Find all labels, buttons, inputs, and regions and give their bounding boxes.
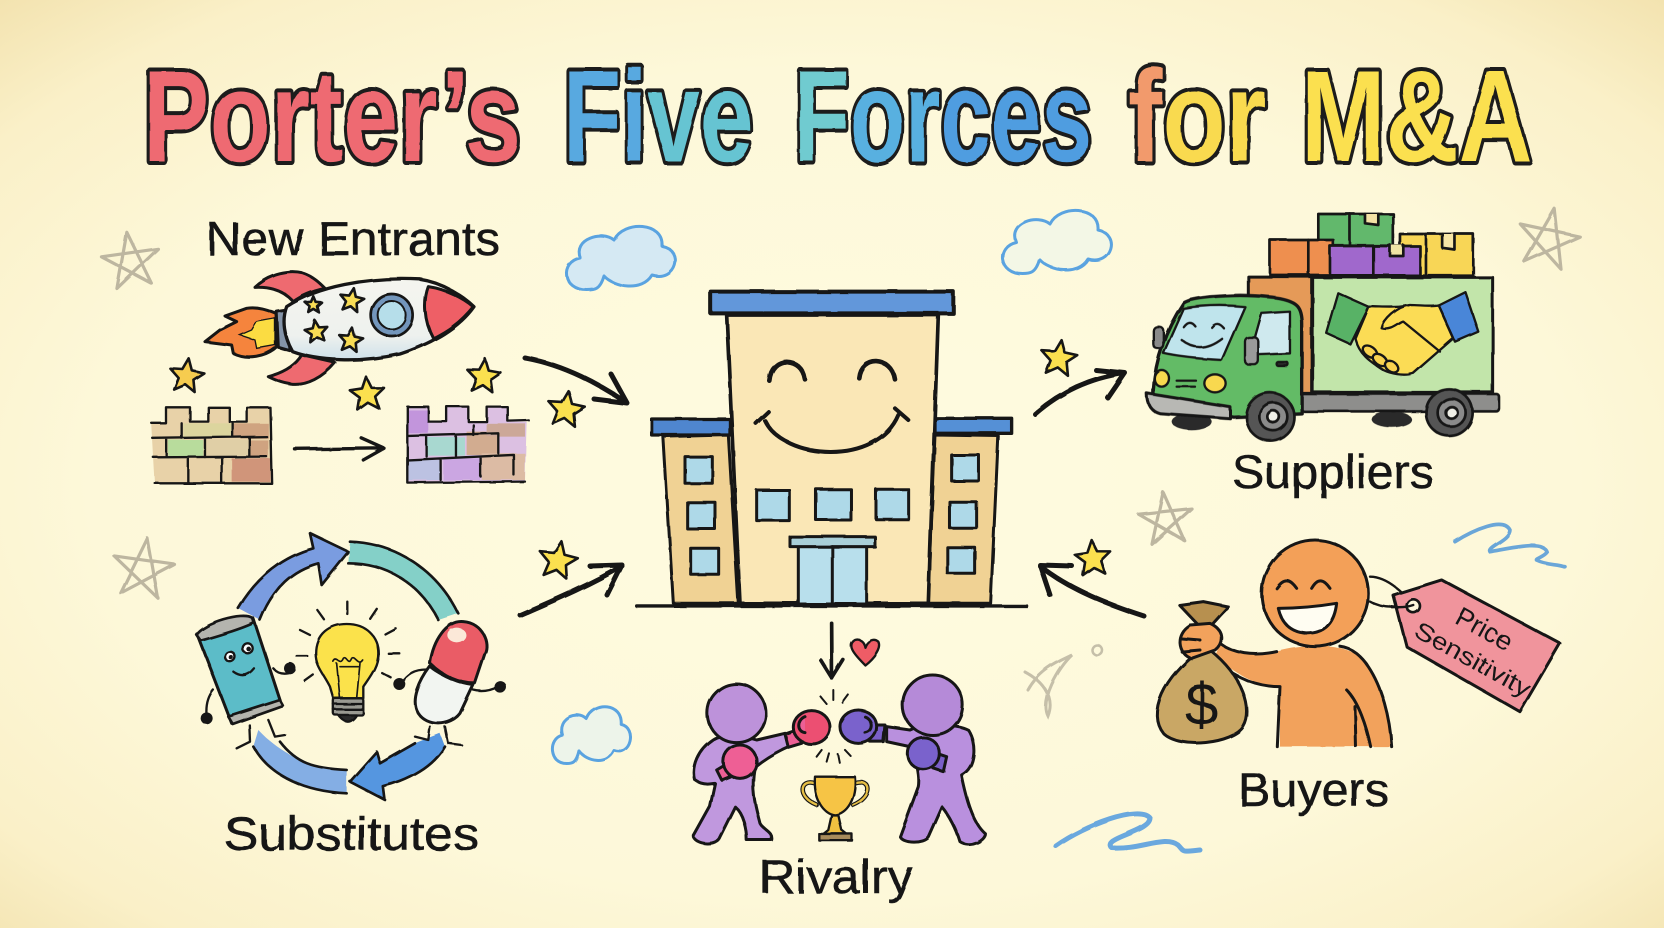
icon: star by substitutes arrow <box>536 538 580 580</box>
title: Forces <box>794 43 1092 189</box>
price tag: Price <box>1450 601 1518 657</box>
icon: delivery truck <box>1147 214 1499 441</box>
wheels <box>1246 389 1473 441</box>
force: new entrants <box>152 212 528 483</box>
force: suppliers <box>1147 214 1499 498</box>
trophy <box>803 777 868 841</box>
arrow: buyers to company <box>1040 565 1144 616</box>
chassis <box>1302 394 1499 411</box>
cloud top right <box>1002 210 1111 274</box>
can character <box>197 616 296 748</box>
title: for <box>1128 43 1266 189</box>
cloud top left <box>566 226 675 290</box>
icon: smiling buyer with money bag <box>1157 540 1560 747</box>
label: buyers: Buyers <box>1238 763 1389 816</box>
decorative doodles: grey stars <box>99 202 1584 600</box>
cargo boxes <box>1270 214 1473 276</box>
icon: heart <box>851 640 879 665</box>
arrow: company to suppliers <box>1035 370 1125 414</box>
impact sparks <box>817 690 851 762</box>
money bag <box>1157 602 1247 743</box>
icon: new brick wall <box>407 407 528 483</box>
money bag: $ <box>1185 671 1218 738</box>
title: M&A <box>1301 43 1532 189</box>
windows <box>685 455 979 574</box>
ground line <box>637 601 1027 611</box>
light bulb <box>297 602 399 722</box>
icon: rocket <box>205 272 474 384</box>
blue scribble lower centre <box>1056 814 1200 851</box>
cloud bottom left <box>552 707 630 764</box>
grey scribble <box>1025 645 1102 716</box>
icon: gold stars <box>168 356 502 410</box>
icon: star by new entrants arrow <box>546 389 587 428</box>
head <box>1262 540 1368 647</box>
bumper <box>1147 393 1230 418</box>
force: rivalry <box>693 623 985 903</box>
label: suppliers: Suppliers <box>1232 445 1434 498</box>
blue scribble near tag <box>1455 524 1565 567</box>
cycle arrows <box>238 533 458 800</box>
left fighter <box>693 684 830 844</box>
icon: cycle of substitutes <box>197 533 506 800</box>
central company building <box>637 292 1027 606</box>
right fighter <box>840 675 985 844</box>
pill character <box>393 622 506 745</box>
handshake <box>1327 292 1478 375</box>
label: new entrants: New Entrants <box>206 212 500 265</box>
label: substitutes: Substitutes <box>224 807 479 860</box>
icon: star by buyers arrow <box>1074 539 1112 576</box>
far wheels <box>1172 411 1412 430</box>
arrow: substitutes to company <box>520 565 622 615</box>
force: buyers <box>1157 524 1565 816</box>
main block <box>711 292 953 603</box>
right tower <box>928 418 1012 603</box>
title: Five <box>563 43 753 189</box>
label: rivalry: Rivalry <box>759 850 914 903</box>
arrow: new entrants to company <box>525 358 627 403</box>
arrow: company to rivalry <box>821 623 843 678</box>
price tag <box>1370 577 1560 712</box>
cab windows and face <box>1153 305 1290 392</box>
icon: boxing rivals <box>693 623 985 844</box>
cargo body <box>1248 277 1493 393</box>
smiling face <box>756 362 908 452</box>
title: Porter’s <box>143 43 521 189</box>
cab <box>1153 296 1302 417</box>
arrow: wall to wall <box>295 438 384 460</box>
icon: star by suppliers arrow <box>1039 338 1080 377</box>
title <box>143 43 1532 189</box>
force: substitutes <box>197 533 506 860</box>
left tower <box>652 419 738 603</box>
body <box>1213 643 1392 747</box>
icon: old brick wall <box>152 407 272 483</box>
door <box>790 537 875 604</box>
price tag: Sensitivity <box>1410 617 1535 703</box>
